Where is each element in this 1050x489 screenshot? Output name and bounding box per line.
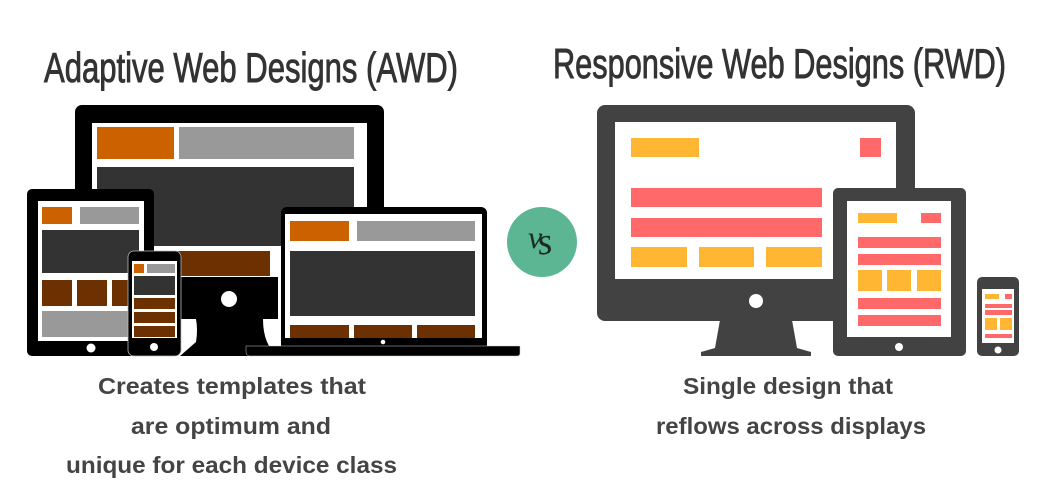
text block: responsive description [656,373,926,439]
icon: adaptive tablet [27,189,154,356]
title: adaptive web designs: Adaptive Web Designs (AWD) [44,44,458,91]
text block: adaptive description: Creates templates that [98,373,366,399]
badge: vs: s [534,220,555,264]
text block: adaptive description [66,373,397,478]
icon: responsive tablet [833,188,966,356]
illustration: adaptive devices [27,105,520,356]
icon: responsive desktop monitor [597,105,915,356]
icon: adaptive laptop [246,207,520,356]
text block: responsive description: reflows across displays [656,413,926,439]
icon: adaptive desktop monitor [75,105,384,356]
icon: adaptive phone [128,251,181,356]
badge: vs [507,207,577,277]
text block: responsive description: Single design that [683,373,893,399]
icon: responsive phone [977,277,1019,356]
badge: vs: v [528,219,543,255]
text block: adaptive description: unique for each device class [66,452,397,478]
text block: adaptive description: are optimum and [131,413,331,439]
illustration: responsive devices [597,105,1019,356]
